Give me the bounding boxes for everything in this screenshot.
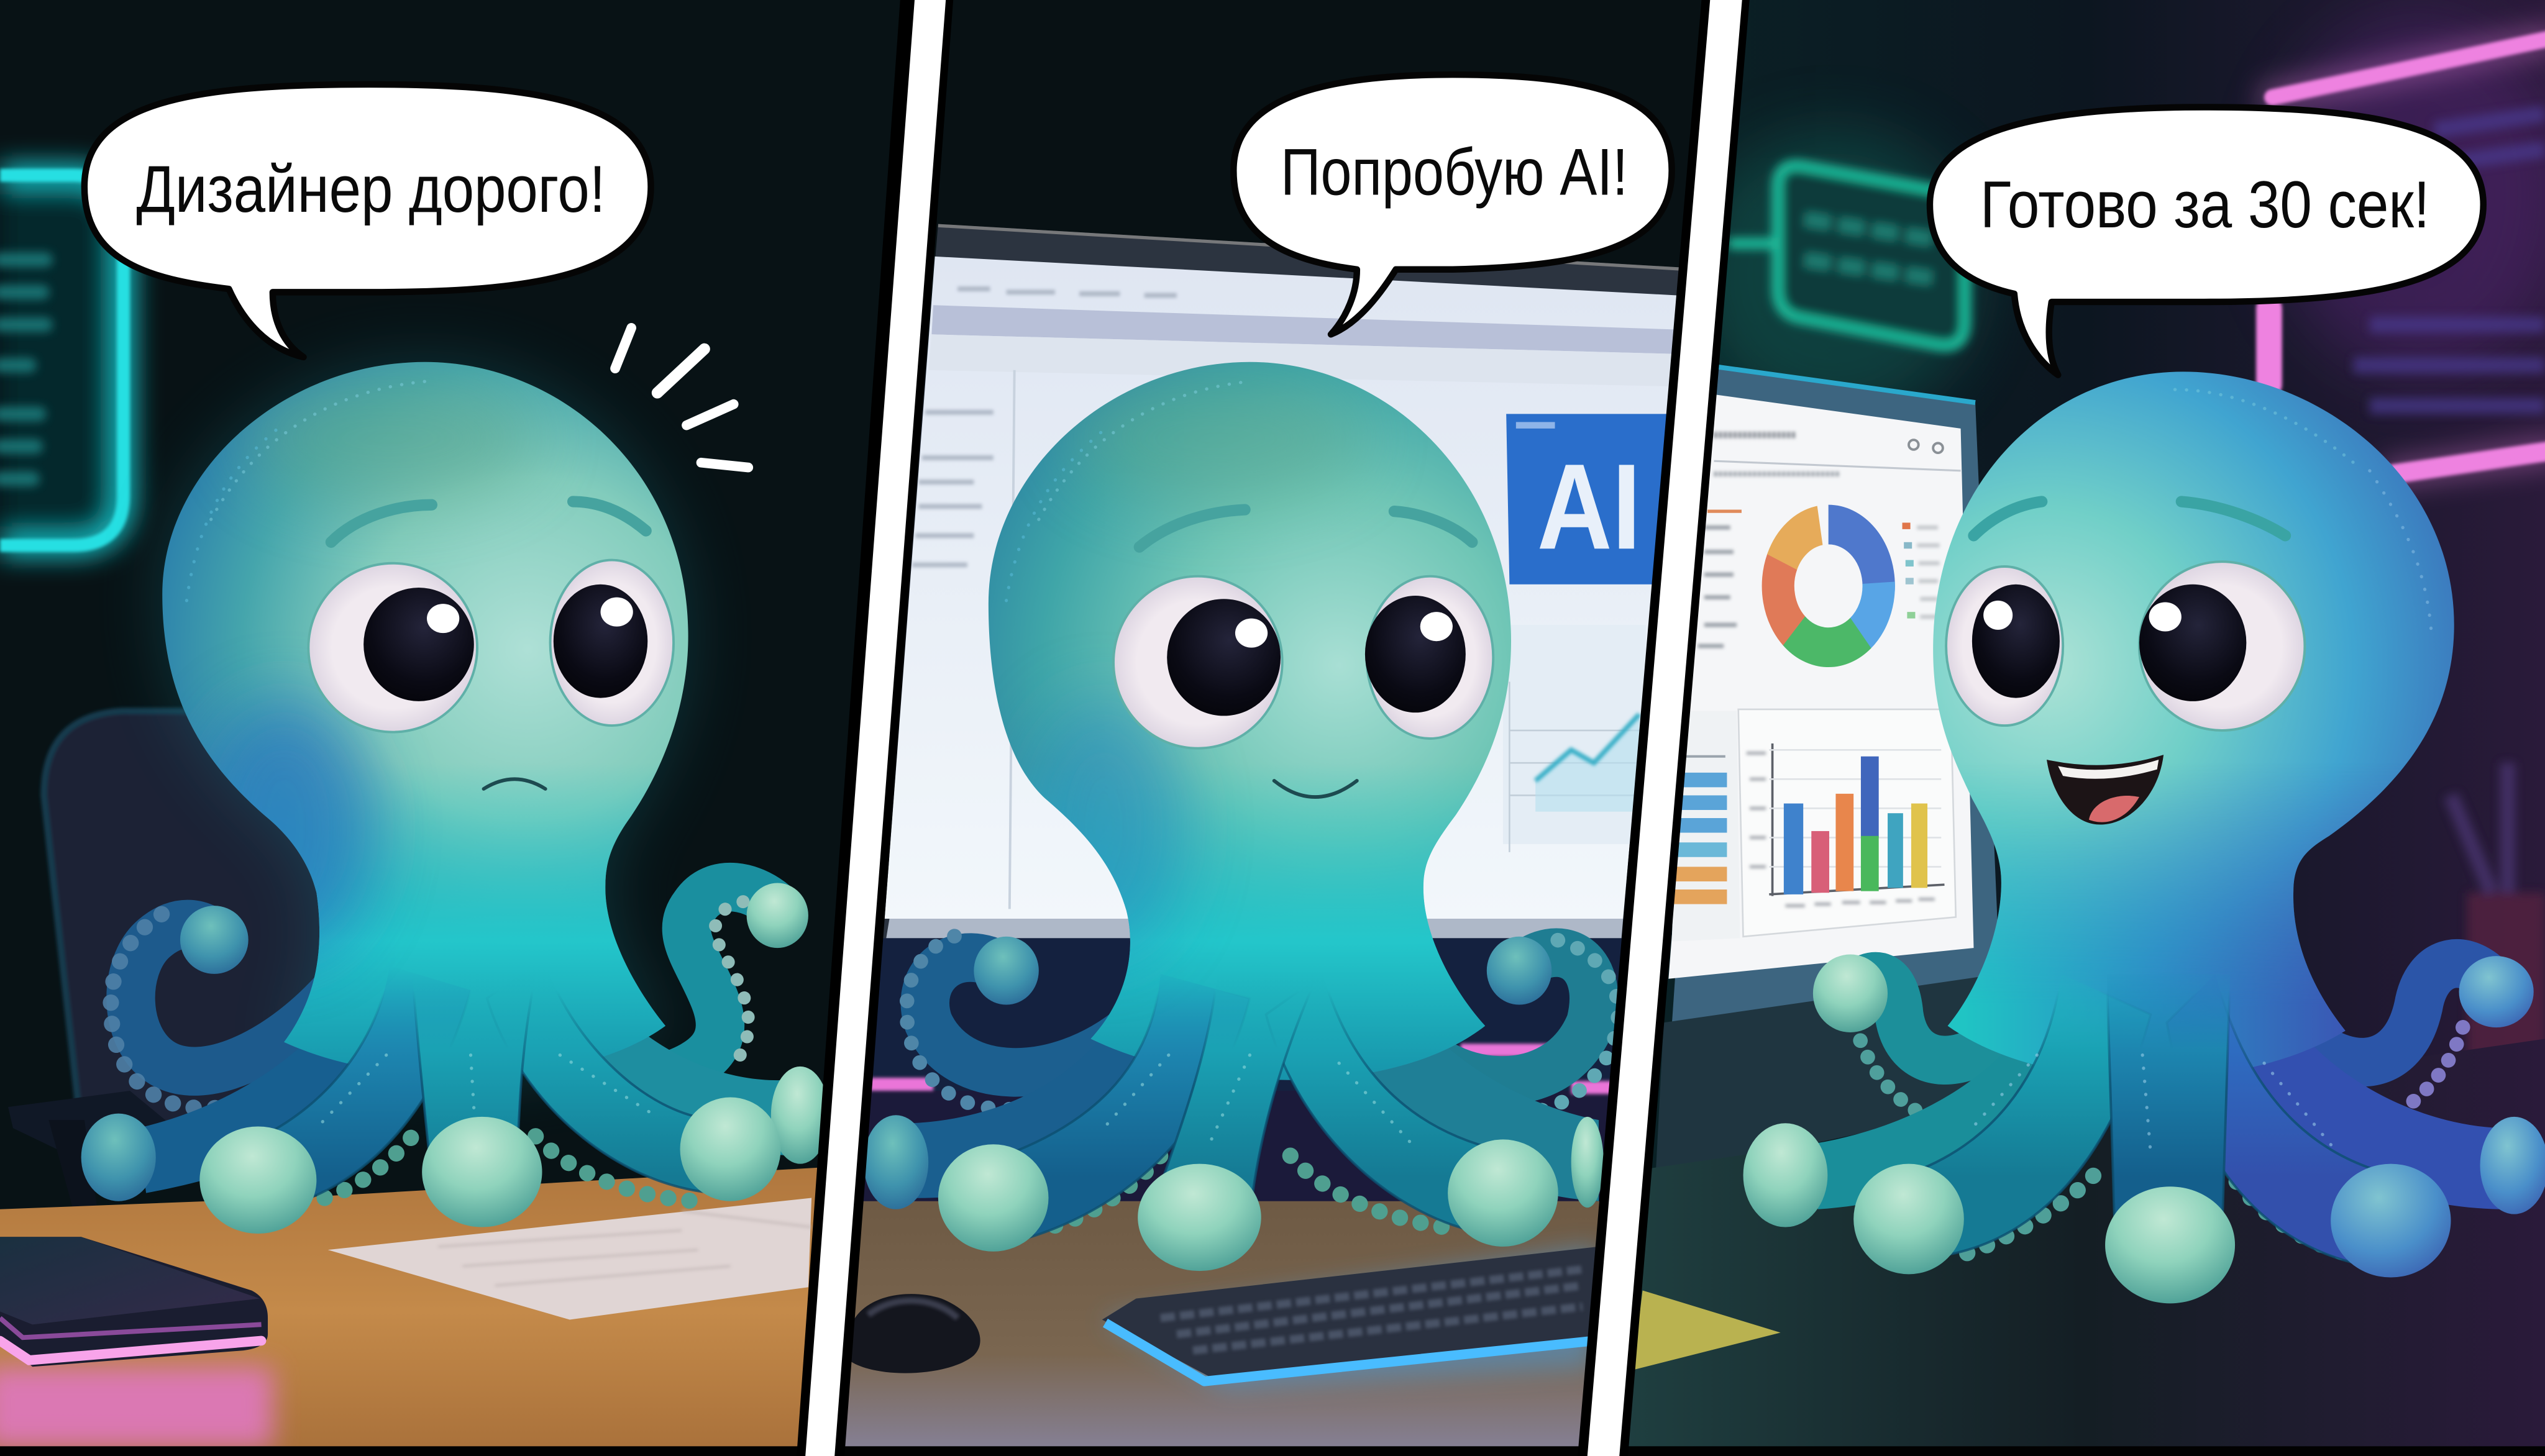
far tentacles — [909, 958, 1599, 1201]
panel 1 background — [0, 0, 900, 1209]
tentacle tips — [1743, 955, 2545, 1303]
AI badge — [1506, 414, 1668, 585]
paper sheet — [328, 1198, 811, 1319]
monitor — [1668, 367, 1999, 1026]
curled tentacles — [907, 935, 1619, 1110]
curled tentacles — [111, 887, 779, 1108]
mouth: frown — [483, 779, 546, 789]
eyes — [308, 560, 674, 732]
lower wall and neon strip — [844, 938, 1623, 1209]
near tentacles — [244, 958, 722, 1209]
tentacle sparkles — [1972, 1055, 2337, 1152]
suckers — [1055, 1156, 1445, 1227]
tentacle tips — [864, 937, 1604, 1271]
monitor — [877, 224, 1688, 958]
panel dividers — [797, 0, 953, 1456]
mouse — [847, 1294, 980, 1373]
mouth: smile — [1274, 781, 1357, 797]
octopus: worried — [81, 362, 829, 1234]
neon green sign — [1729, 165, 1965, 346]
octopus: happy — [1743, 371, 2545, 1303]
eyes — [1946, 562, 2305, 730]
suckers — [324, 1128, 698, 1201]
donut chart — [1757, 499, 1899, 673]
halo — [162, 362, 688, 1077]
head and body — [1933, 371, 2454, 1079]
speech bubble: panel 1: Дизайнер дорого! — [136, 152, 605, 226]
pencil cup — [2451, 763, 2545, 1063]
AI badge: AI — [1537, 439, 1641, 575]
tentacle tips — [81, 883, 829, 1234]
far tentacles — [138, 942, 795, 1193]
line chart — [1503, 625, 1646, 852]
pink neon lines — [2269, 39, 2545, 474]
dark desk — [1623, 1039, 2545, 1456]
panel: designer is expensive — [0, 0, 909, 1456]
head and body — [989, 362, 1511, 1080]
horizontal bar card — [1672, 711, 1740, 942]
office chair — [8, 711, 390, 1209]
eyes — [1113, 576, 1493, 748]
speech bubble: panel 3: Готово за 30 сек! — [1980, 167, 2430, 242]
yellow notepad — [1633, 1290, 1781, 1370]
worry lines — [615, 328, 748, 468]
octopus: hopeful — [864, 362, 1619, 1271]
speech bubble: panel 1 — [85, 84, 651, 357]
bottom border — [0, 1446, 2545, 1456]
brows — [331, 501, 646, 542]
tentacle sparkles — [1103, 1055, 1412, 1144]
speech bubble: panel 3 — [1930, 107, 2483, 375]
near tentacles — [1899, 974, 2402, 1266]
head and body — [162, 362, 688, 1077]
suckers — [1967, 1160, 2346, 1253]
speech bubble: panel 2 — [1233, 75, 1672, 334]
monitor stand — [1655, 974, 1999, 1177]
phone — [0, 1237, 273, 1448]
panel 3 background — [1623, 0, 2545, 1456]
wooden desk — [0, 1167, 828, 1456]
mouth: open smile — [2047, 755, 2163, 824]
column chart card — [1739, 709, 1956, 937]
curled tentacles — [1850, 963, 2497, 1112]
brows — [1973, 501, 2285, 535]
keyboard — [1102, 1247, 1599, 1388]
speech bubble: panel 2: Попробую AI! — [1281, 135, 1628, 209]
far tentacles — [1810, 974, 2508, 1209]
donut legend — [1903, 522, 1940, 619]
near tentacles — [990, 974, 1509, 1242]
tentacle sparkles — [316, 1055, 649, 1136]
background glows — [1688, 16, 2545, 422]
blurred purple sign — [2354, 114, 2545, 406]
neon sign — [0, 175, 124, 545]
panel: done in 30 seconds — [1623, 0, 2545, 1456]
panel: try AI — [828, 0, 1716, 1456]
desk — [828, 1201, 1623, 1456]
brows — [1140, 510, 1472, 547]
panel 2 background — [839, 0, 1716, 1456]
